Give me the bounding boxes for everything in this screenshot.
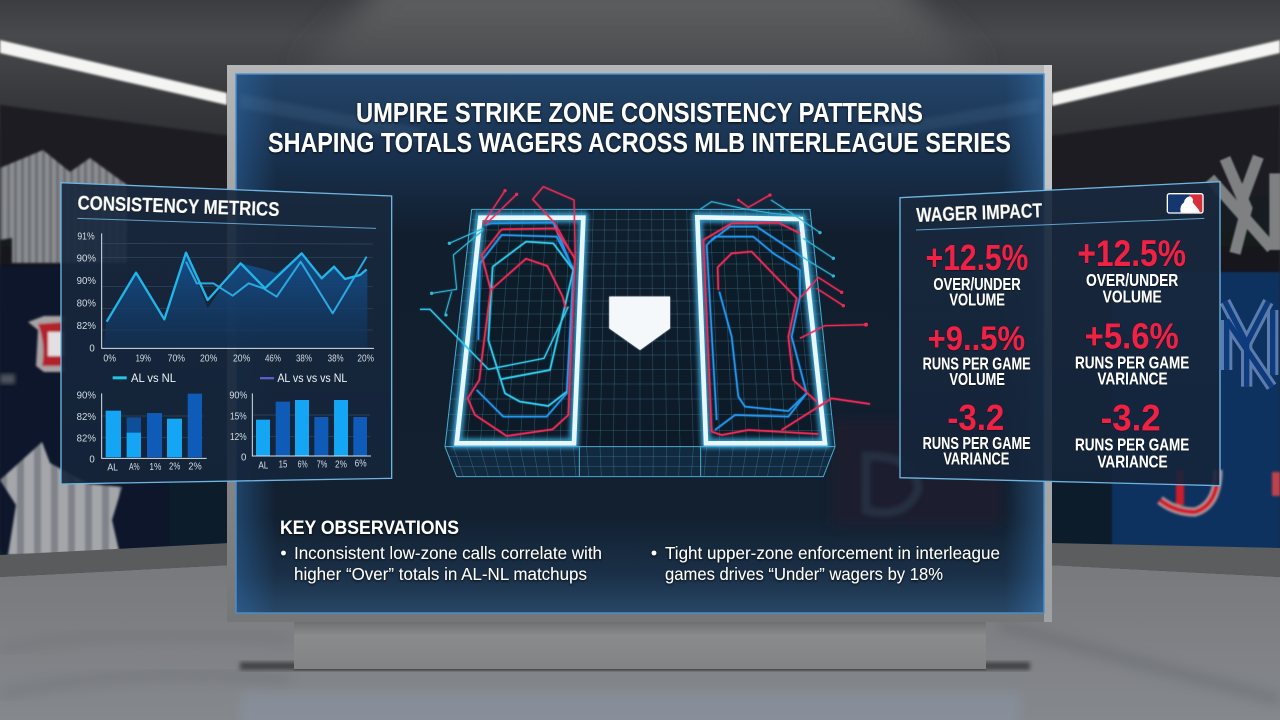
line chart: 80% [77,299,96,310]
heading divider [916,218,1204,230]
line chart: 20% [200,353,218,364]
bar chart left: 0 [89,455,95,466]
stat: runs per game variance upper: VARIANCE [1097,368,1168,388]
line chart: 38% [296,353,312,364]
stat: over/under volume left [926,237,1028,310]
stat: runs variance lower left: -3.2 [947,397,1004,438]
observation: upper-zone enforcement: Tight upper-zone enforcement in interleague [665,543,1000,563]
bar chart left: 82% [77,434,96,445]
panel: consistency metrics [61,183,392,484]
monitor frame [227,65,1052,622]
stat: over/under volume left: OVER/UNDER [933,274,1021,294]
bar chart right: 6% [355,459,367,470]
logo: red D left [28,316,64,372]
bar chart left [77,390,207,474]
bar chart right: 6% [298,459,308,470]
back wall right [1050,105,1280,578]
bar chart right: 7% [317,459,328,470]
left zone tracking lines [420,187,575,436]
bar chart left: AL [107,463,119,474]
bar chart left: 82% [77,412,96,423]
bar chart left: A% [129,462,140,473]
panel: wager impact [900,182,1220,486]
icon: league logo [1167,193,1204,214]
title [268,97,1011,158]
strike zone diagram [420,187,870,477]
line chart: 20% [233,353,251,364]
logo: red D lower right [1160,470,1218,512]
stat: over/under volume left: +12.5% [926,237,1028,278]
title: SHAPING TOTALS WAGERS ACROSS MLB INTERLEAGUE SERIES [268,127,1011,158]
bar chart right: 0 [241,453,246,464]
stat: runs variance lower left [923,397,1031,468]
line chart: 20% [357,353,374,364]
pedestal [240,621,1030,670]
bar chart left: 2% [188,461,202,472]
line chart [77,231,374,364]
stat: runs per game variance upper: RUNS PER GAME [1075,352,1189,372]
back wall left [0,105,230,578]
stat: runs per game variance upper: +5.6% [1085,315,1179,356]
stat: runs per game volume: +9..5% [928,320,1025,358]
legend left [113,371,176,385]
panel heading: WAGER IMPACT [916,199,1043,227]
bar chart right: 90% [229,390,248,401]
key observations heading: KEY OBSERVATIONS [280,517,459,539]
floor [0,565,1280,720]
stat: runs variance lower right: VARIANCE [1097,451,1168,471]
key observations [280,517,1000,584]
monitor screen [236,74,1044,613]
bar chart right [229,390,371,471]
line chart: 38% [328,353,344,364]
bar chart left: 2% [169,461,181,472]
platform [440,209,840,477]
bar chart right: 12% [230,432,247,443]
wall text fragment left [0,374,15,384]
line chart: 90% [77,276,96,287]
stat: over/under volume right: VOLUME [1103,286,1162,306]
stat: runs variance lower right: RUNS PER GAME [1075,435,1189,455]
heading divider [77,218,376,228]
stat: runs variance lower left: RUNS PER GAME [923,433,1031,453]
stat: runs per game variance upper [1075,315,1189,388]
bar chart right: 2% [335,459,347,470]
ceiling light left [0,40,227,105]
observation: low-zone calls: higher “Over” totals in AL-NL matchups [294,564,587,584]
line chart: 91% [77,231,95,242]
stat: runs per game volume [923,320,1031,389]
logo: NY lower right [1225,302,1273,387]
bar chart left: 90% [77,390,96,401]
bar chart right: 15% [230,411,247,422]
stat: runs variance lower right: -3.2 [1101,397,1161,439]
observation: upper-zone enforcement [652,543,1000,584]
stat: runs variance lower left: VARIANCE [943,448,1009,468]
logo: NY upper right [1210,157,1275,253]
line chart: 0 [89,344,95,355]
panel background [61,183,392,484]
observation: low-zone calls: Inconsistent low-zone calls correlate with [294,543,602,563]
stat: over/under volume right: OVER/UNDER [1086,270,1179,290]
legend left: AL vs NL [131,371,176,385]
right zone endpoints [737,193,868,327]
left strike zone frame [457,218,583,443]
right strike zone frame [697,217,825,443]
stat: over/under volume right [1077,232,1186,306]
stat: runs per game volume: VOLUME [949,369,1005,389]
display monitor [227,65,1052,670]
legend right: AL vs vs vs NL [277,371,348,385]
navy wall panel left [0,266,168,551]
line chart: 70% [168,353,185,364]
panel heading: CONSISTENCY METRICS [77,191,280,221]
bar chart left: 1% [149,462,162,473]
bar chart right: 15 [279,459,287,470]
jersey lower left [0,442,122,555]
observation: low-zone calls [281,543,602,584]
stat: over/under volume right: +12.5% [1077,232,1186,274]
icon: home plate [609,297,670,350]
line chart: 82% [77,321,96,332]
right zone tracking lines [700,195,870,435]
bar chart right: AL [258,460,269,471]
stat: runs variance lower right [1075,397,1189,471]
stat: over/under volume left: VOLUME [949,290,1005,310]
jersey upper left [0,150,127,263]
logo: red fragment far right [1272,472,1280,496]
ceiling light right [1052,40,1280,106]
line chart: 0% [103,353,116,364]
line chart: 90% [77,254,96,265]
baseboard [0,543,230,577]
title: UMPIRE STRIKE ZONE CONSISTENCY PATTERNS [356,97,923,128]
blue wall panel right [1112,272,1280,552]
stat: runs per game volume: RUNS PER GAME [923,353,1031,373]
left zone endpoints [430,189,518,317]
line chart: 46% [265,353,281,364]
observation: upper-zone enforcement: games drives “Under” wagers by 18% [665,564,943,584]
line chart: 19% [136,353,151,364]
panel background [900,182,1220,486]
